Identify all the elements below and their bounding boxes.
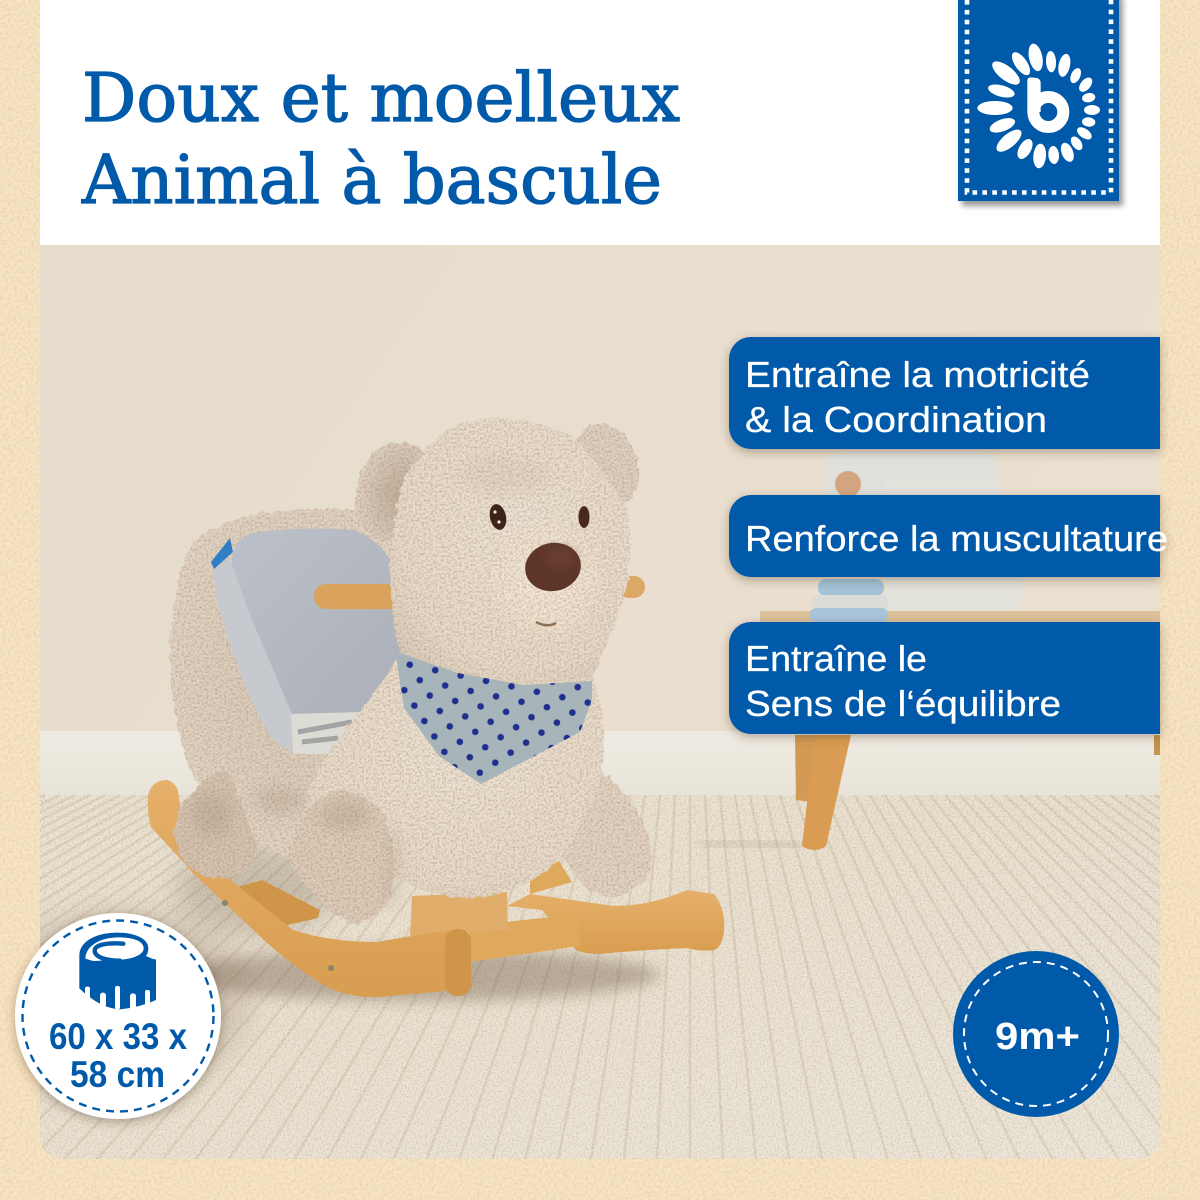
side table with pillow and stacking toy	[760, 452, 1160, 850]
rear slat	[238, 880, 320, 926]
head	[390, 418, 630, 684]
baseboard	[40, 731, 1160, 796]
dashed ring	[964, 962, 1108, 1106]
right slat	[530, 861, 572, 894]
size badge	[15, 913, 221, 1119]
blue tag	[211, 538, 233, 569]
right handle peg	[624, 576, 645, 598]
bolts	[222, 900, 334, 971]
cushion side strip	[213, 558, 293, 752]
icon: measuring tape	[79, 933, 156, 1009]
right ear	[576, 423, 640, 506]
photo: room scene	[0, 245, 1200, 1160]
feature pill: motricité: Entraîne la motricité	[745, 354, 1090, 395]
nose	[525, 542, 582, 592]
age badge	[953, 951, 1119, 1117]
body	[300, 653, 604, 898]
size text	[49, 1016, 187, 1095]
logo: flower with b	[977, 42, 1100, 169]
left handle	[314, 584, 393, 609]
forehead shading	[468, 460, 544, 488]
back cushion	[232, 529, 406, 714]
wall	[40, 245, 1160, 735]
white header band	[40, 0, 1160, 245]
feature pill: musculature	[729, 495, 1168, 577]
rocking wooden base	[148, 780, 724, 997]
feature pill: motricité	[729, 337, 1160, 449]
furry body and limbs	[174, 416, 650, 924]
eyes	[490, 504, 590, 530]
stitched border	[967, 0, 1111, 192]
feature pill: équilibre: Sens de l‘équilibre	[745, 683, 1061, 724]
feature pill: équilibre	[729, 622, 1160, 734]
fur shading	[192, 786, 395, 905]
size text: 58 cm	[70, 1054, 165, 1095]
size text: 60 x 33 x	[49, 1016, 187, 1057]
title: Animal à bascule	[81, 141, 662, 219]
rocker end cap	[445, 929, 471, 996]
title: Doux et moelleux	[82, 59, 680, 137]
mouth	[536, 622, 556, 625]
seat harness	[291, 712, 362, 754]
feature pill: motricité: & la Coordination	[745, 399, 1047, 440]
right rocker	[507, 890, 724, 954]
teddy bear seal	[170, 416, 650, 924]
right flipper	[561, 772, 650, 898]
cross bars	[469, 914, 580, 962]
feature pill: équilibre: Entraîne le	[745, 638, 927, 679]
logo tag	[958, 0, 1119, 201]
left ear	[354, 442, 423, 542]
title	[81, 59, 680, 219]
dashed ring	[22, 920, 214, 1112]
age text: 9m+	[995, 1016, 1080, 1058]
rear flipper	[174, 772, 256, 878]
muzzle	[538, 589, 553, 594]
feature pill: musculature: Renforce la muscultature	[745, 518, 1168, 559]
left rocker	[148, 780, 469, 997]
seat shell	[170, 508, 420, 860]
front flipper	[289, 790, 394, 924]
bandana	[396, 653, 592, 784]
shadow under rocker	[175, 845, 660, 1001]
carpet	[0, 795, 1200, 1160]
center block	[410, 892, 508, 936]
